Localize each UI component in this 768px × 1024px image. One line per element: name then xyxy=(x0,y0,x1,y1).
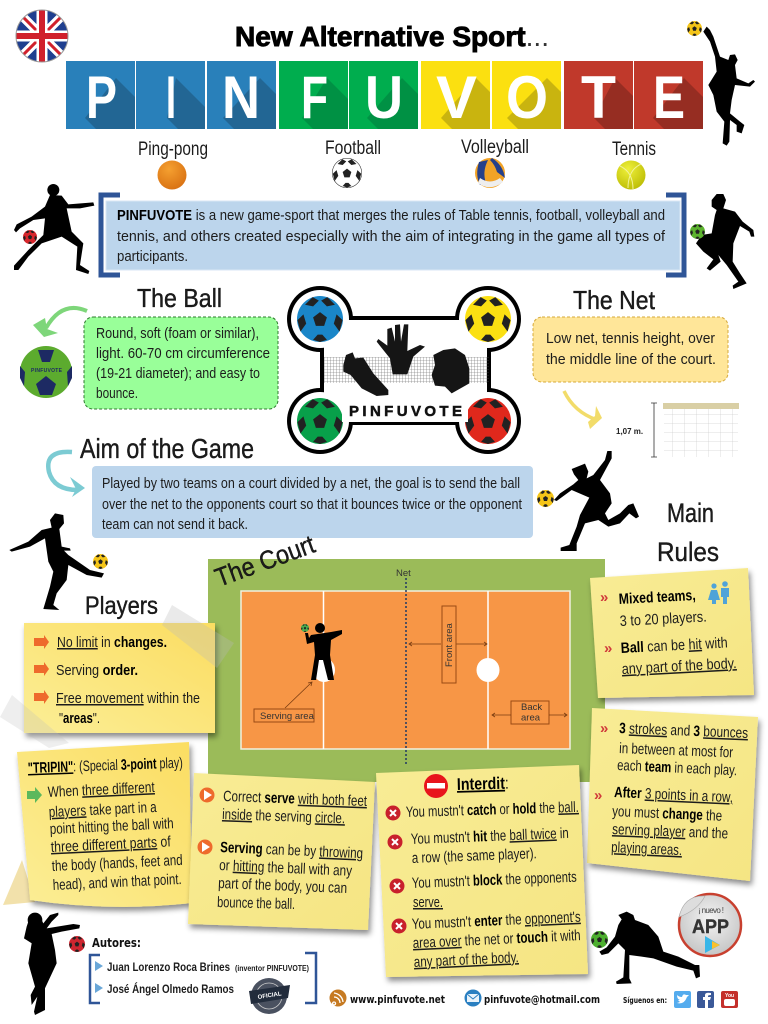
panel: the ball description xyxy=(84,317,278,409)
heading banner: PINFUVOTE letter tiles xyxy=(66,61,703,131)
label: serving area: Serving area xyxy=(260,711,315,722)
panel: the net description xyxy=(533,317,728,382)
label: front area: Front area xyxy=(444,622,455,667)
panel: serve sticky note: bounce the ball. xyxy=(217,894,295,913)
tape pieces xyxy=(0,605,234,748)
heading: Interdit: Interdit: xyxy=(457,774,509,794)
panel: interdit sticky note: area over the net or touch it with xyxy=(412,927,581,952)
footer website: www.pinfuvote.net xyxy=(350,993,445,1006)
panel: main rules sticky note 1: 3 to 20 players. xyxy=(619,608,707,630)
label: back area: area xyxy=(521,712,541,724)
panel: players sticky note: Free movement within the xyxy=(56,690,200,707)
badge: nuevo APP sticker: APP xyxy=(692,917,729,938)
panel: serve sticky note: Correct serve with both feet xyxy=(223,788,368,810)
intro text: participants. xyxy=(117,248,188,265)
panel: TRIPIN sticky note: "TRIPIN": (Special 3-point play) xyxy=(28,755,183,777)
icon: play bullets xyxy=(198,788,214,854)
panel: TRIPIN sticky note xyxy=(3,742,192,907)
icon: twitter xyxy=(674,991,691,1008)
panel: interdit sticky note xyxy=(376,765,588,977)
tennis label and ball: Tennis xyxy=(612,139,656,160)
label: back area: Back xyxy=(521,702,542,713)
heading: Main Rules: Main xyxy=(667,498,714,528)
panel: main rules sticky note 2: serving player and the xyxy=(612,821,728,842)
panel: aim of the game: team can not send it back. xyxy=(102,516,248,533)
icon: official stamp: OFICIAL xyxy=(257,991,282,1001)
icon: official stamp xyxy=(249,978,290,1014)
ping-pong label and ball xyxy=(138,139,208,190)
panel: main rules sticky note 2: 3 strokes and 3 bounces xyxy=(619,720,748,742)
panel: interdit sticky note: You mustn't enter the opponent's xyxy=(411,909,581,933)
icon: red ball xyxy=(69,936,85,952)
tennis label and ball xyxy=(612,139,656,190)
heading: Main Rules xyxy=(657,498,719,567)
heading: Aim of the Game: Aim of the Game xyxy=(80,433,254,464)
heading: The Ball: The Ball xyxy=(137,283,222,313)
panel: players sticky note: Serving order. xyxy=(56,662,138,679)
panel: TRIPIN sticky note: When three different xyxy=(47,779,156,801)
badge: nuevo APP sticker: ¡ nuevo ! xyxy=(698,906,724,915)
player silhouette: top right jumping xyxy=(687,21,755,146)
panel: players sticky note xyxy=(0,605,234,748)
panel: aim of the game xyxy=(92,466,533,538)
panel: interdit sticky note: You mustn't hit the ball twice in xyxy=(411,825,569,848)
panel: interdit sticky note: any part of the body. xyxy=(413,949,519,971)
player silhouette: bottom left xyxy=(24,913,80,1015)
chevrons: » xyxy=(600,720,608,737)
football label and ball xyxy=(325,138,381,188)
intro text panel with brackets xyxy=(101,195,684,275)
panel: main rules sticky note 2: playing areas. xyxy=(611,839,682,859)
chevrons xyxy=(600,589,612,657)
heading banner: PINFUVOTE letter tiles: I xyxy=(166,64,176,131)
badge: nuevo APP sticker xyxy=(679,894,741,956)
panel: TRIPIN sticky note: players take part in a xyxy=(48,799,158,821)
panel: the ball description: light. 60-70 cm circumference xyxy=(96,345,270,362)
logo balls xyxy=(297,296,511,444)
panel: serve sticky note: Serving can be by throwing xyxy=(220,839,363,862)
heading banner: PINFUVOTE letter tiles: V xyxy=(436,64,477,131)
icon: no entry sign xyxy=(424,774,448,798)
icon: UK flag language button xyxy=(16,10,68,62)
heading banner: PINFUVOTE letter tiles: E xyxy=(653,64,685,131)
icon: youtube: You xyxy=(725,993,734,999)
footer email: pinfuvote@hotmail.com xyxy=(484,993,600,1006)
panel: TRIPIN sticky note: the body (hands, feet and xyxy=(51,852,183,875)
chevrons: » xyxy=(604,640,612,657)
icons: red cross bullets xyxy=(386,806,406,934)
heading banner: PINFUVOTE letter tiles: T xyxy=(581,64,616,131)
heading banner: PINFUVOTE letter tiles: N xyxy=(222,64,260,131)
authors block xyxy=(90,936,316,1003)
chart: the court diagram xyxy=(208,529,605,782)
panel: interdit sticky note: a row (the same player). xyxy=(412,845,537,867)
label: back area xyxy=(492,701,567,724)
heading: Main Rules: Rules xyxy=(657,537,719,567)
chevrons: » xyxy=(600,589,608,606)
icon: green PINFUVOTE ball xyxy=(20,346,72,398)
heading banner: PINFUVOTE letter tiles: U xyxy=(365,64,403,131)
court surface xyxy=(241,591,570,749)
panel: serve sticky note: inside the serving circle. xyxy=(222,806,345,827)
intro text: PINFUVOTE is a new game-sport that merges the rules of Table tennis, football, volleyball and xyxy=(117,207,665,224)
footer website xyxy=(330,990,445,1006)
player silhouette: kicker left xyxy=(9,513,108,610)
panel: the ball description: bounce. xyxy=(96,385,138,402)
panel: interdit sticky note: You mustn't block the opponents xyxy=(412,869,577,892)
panel: main rules sticky note 1: any part of the body. xyxy=(621,655,737,678)
volleyball label and ball: Volleyball xyxy=(461,137,529,158)
chevrons xyxy=(594,720,608,804)
panel: main rules sticky note 2 xyxy=(587,708,758,881)
logo wordmark: PINFUVOTE xyxy=(349,403,462,420)
panel: main rules sticky note 2: in between at most for xyxy=(619,740,733,761)
intro text xyxy=(117,207,666,265)
chevrons: » xyxy=(594,787,602,804)
panel: the net description: Low net, tennis height, over xyxy=(546,330,715,347)
icon: green PINFUVOTE ball: PINFUVOTE xyxy=(31,368,63,374)
heading banner: PINFUVOTE letter tiles: P xyxy=(86,64,117,131)
footer social icons xyxy=(623,991,738,1008)
panel: the ball description: Round, soft (foam or similar), xyxy=(96,325,259,342)
panel: serve sticky note: or hitting the ball with any xyxy=(219,857,353,880)
arrow: green curved to ball xyxy=(33,308,87,337)
panel: players sticky note: No limit in changes. xyxy=(57,634,167,651)
panel: main rules sticky note 2: After 3 points in a row, xyxy=(614,784,733,806)
net illustration with height xyxy=(616,403,739,457)
icon bullets xyxy=(34,635,49,704)
arrow: yellow to net xyxy=(564,391,602,429)
net illustration with height: 1,07 m. xyxy=(616,427,643,436)
panel: TRIPIN sticky note: point hitting the ball with xyxy=(49,815,174,838)
panel: main rules sticky note 2: each team in each play. xyxy=(617,757,737,779)
heading banner: PINFUVOTE letter tiles: O xyxy=(506,64,548,131)
panel: players sticky note: "areas". xyxy=(59,710,100,727)
ping-pong label and ball: Ping-pong xyxy=(138,139,208,160)
icon: football boot xyxy=(343,352,388,396)
sport labels and balls xyxy=(138,137,656,190)
icon: facebook xyxy=(697,991,714,1008)
authors block: Juan Lorenzo Roca Brines xyxy=(107,960,230,974)
intro text: tennis, and others created especially with the aim of integrating in the game all types of xyxy=(117,228,666,245)
player silhouette: left top xyxy=(14,184,94,274)
player silhouette: right top xyxy=(690,194,754,289)
panel: main rules sticky note 1 xyxy=(590,568,754,698)
panel: interdit sticky note: You mustn't catch or hold the ball. xyxy=(406,799,579,821)
heading: Players: Players xyxy=(85,592,158,620)
panel: serve sticky note xyxy=(188,773,375,930)
icon: green arrow xyxy=(27,787,42,803)
panel: serve sticky note: part of the body, you can xyxy=(218,875,347,897)
heading banner: PINFUVOTE letter tiles: F xyxy=(301,64,328,131)
panel: the net description: the middle line of the court. xyxy=(546,351,716,368)
panel: main rules sticky note 1: Ball can be hit with xyxy=(620,634,728,657)
authors block: José Ángel Olmedo Ramos xyxy=(107,981,234,996)
authors block: (inventor PINFUVOTE) xyxy=(235,964,309,973)
logo: PINFUVOTE bone emblem xyxy=(287,286,521,454)
label: serving area xyxy=(254,682,315,722)
panel: TRIPIN sticky note: three different parts of xyxy=(50,833,172,856)
label: front area xyxy=(409,606,487,683)
icon: mixed people xyxy=(708,581,729,604)
player silhouette: bottom right diving xyxy=(591,912,700,984)
authors block: Autores: xyxy=(92,936,141,950)
player on serving circle xyxy=(301,623,342,680)
panel: the ball description: (19-21 diameter); and easy to xyxy=(96,365,260,382)
panel: interdit sticky note: serve. xyxy=(413,894,443,911)
heading: The Net: The Net xyxy=(573,285,656,315)
heading: The Court: The Court xyxy=(211,529,319,593)
icon: head profile xyxy=(432,348,469,393)
volleyball label and ball xyxy=(461,137,529,188)
icon: hand xyxy=(377,324,425,374)
panel: main rules sticky note 1: Mixed teams, xyxy=(618,587,696,608)
arrow: teal curved xyxy=(48,452,85,497)
net line: Net xyxy=(396,568,411,579)
footer email xyxy=(464,990,600,1006)
panel: aim of the game: over the net to the opponents court so that it bounces twice or the opponent xyxy=(102,496,523,513)
panel: main rules sticky note 2: you must change the xyxy=(612,803,722,825)
player silhouette: kicker centre right xyxy=(537,451,639,551)
title: New Alternative Sport: New Alternative Sport... xyxy=(235,21,549,52)
football label and ball: Football xyxy=(325,138,381,159)
panel: aim of the game: Played by two teams on a court divided by a net, the goal is to send the ball xyxy=(102,475,520,492)
panel: TRIPIN sticky note: head), and win that point. xyxy=(52,871,182,894)
footer social icons: Síguenos en: xyxy=(623,996,667,1005)
